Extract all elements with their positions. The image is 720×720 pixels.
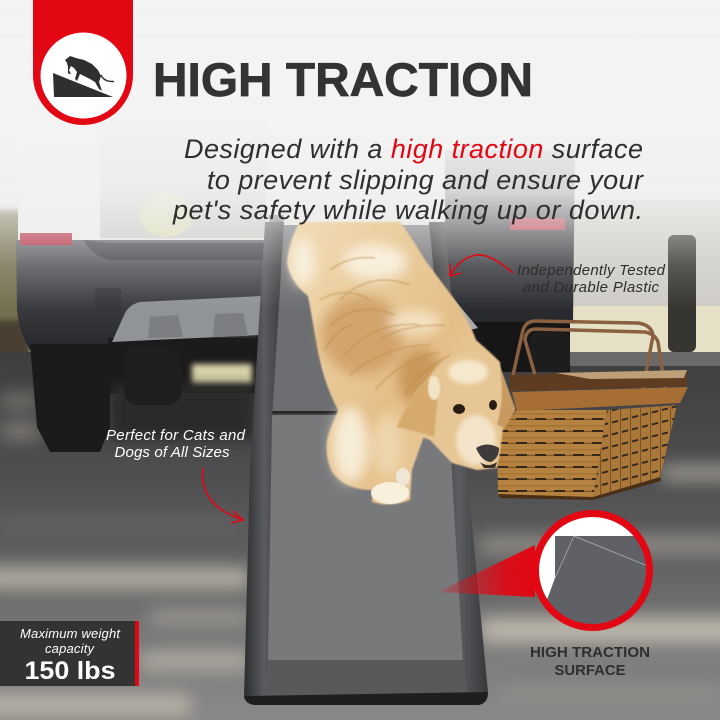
callout: independently tested [517,262,666,296]
car [16,90,575,452]
description text: pet's safety while walking up or down. [172,195,643,225]
callout: cats and dogs [106,427,246,461]
callout: cats and dogs: Perfect for Cats and [106,427,246,444]
title: HIGH TRACTION [153,53,533,106]
left ear [397,380,437,437]
front paw [371,482,409,504]
arrow: cats and dogs callout [202,468,243,523]
callout: independently tested: and Durable Plastic [523,279,660,296]
icon: dog climbing slope [53,56,114,97]
fur shading [291,238,442,483]
top white fade [0,0,720,310]
far tire [124,345,182,405]
weight capacity panel: 150 lbs [24,657,116,685]
left rail [244,222,284,698]
weight capacity panel [0,621,139,686]
description text: to prevent slipping and ensure your [207,165,644,195]
basket [497,321,688,500]
label: high traction surface [530,645,650,679]
bumper trim [112,296,262,342]
right ear [497,370,515,428]
magnifier: traction surface detail [438,514,660,640]
label: high traction surface: HIGH TRACTION [530,645,650,661]
ramp [244,215,488,705]
description text: Designed with a high traction surface [184,134,643,164]
badge [33,0,133,125]
muzzle [456,415,496,465]
dog head [397,350,515,470]
basket handle [513,321,667,404]
ramp foot lip [250,660,480,700]
weight capacity panel: Maximum weight [20,626,121,641]
rear tire [30,344,110,452]
right rail [429,222,488,696]
nose [476,444,499,462]
arrow: durable plastic callout [450,255,513,276]
weight capacity panel: capacity [45,641,96,656]
magnifier pointer [438,545,535,597]
fur strands [320,258,450,395]
label: high traction surface: SURFACE [554,663,626,679]
dog body [287,222,505,505]
callout: cats and dogs: Dogs of All Sizes [114,444,230,461]
dog [287,222,515,505]
description text [172,134,644,225]
callout: independently tested: Independently Tested [517,262,666,279]
